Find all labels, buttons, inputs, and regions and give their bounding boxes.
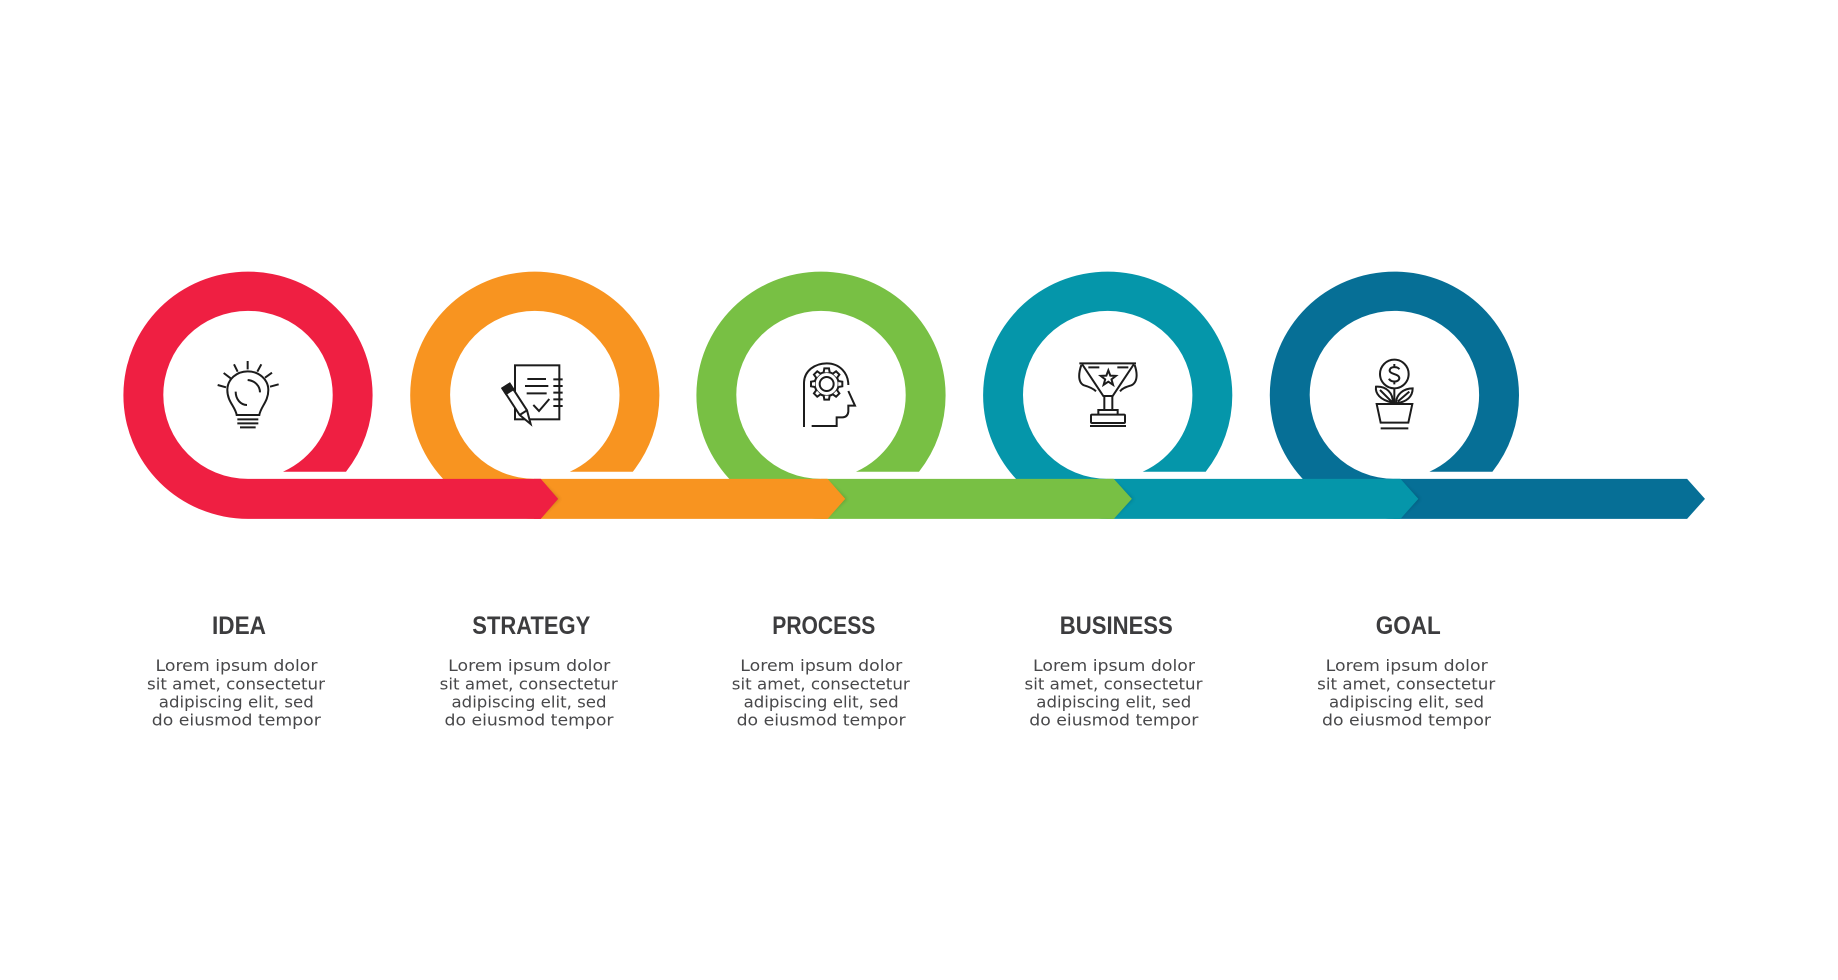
step 4 text [1024,612,1203,730]
step 5 text [1317,612,1496,730]
step 2: orange ring and arrow [410,272,847,519]
step 2 text [440,612,618,730]
heading: strategy: STRATEGY [472,612,591,640]
body text: idea: Lorem ipsum dolor [156,656,318,675]
heading: business: BUSINESS [1060,612,1173,640]
icon: light bulb [218,361,279,427]
step 1: red ring and arrow [123,272,560,519]
body text: idea: adipiscing elit, sed [159,692,314,712]
body text: process: do eiusmod tempor [737,711,906,730]
step 3 text [732,612,910,730]
body text: idea [147,656,325,730]
icon: notebook and pen [502,365,563,424]
heading: goal: GOAL [1376,612,1441,640]
icon: trophy [1079,363,1137,426]
body text: business: adipiscing elit, sed [1036,692,1191,712]
body text: idea: sit amet, consectetur [147,674,325,693]
step 1 text [147,612,325,730]
body text: goal [1317,656,1496,730]
body text: business: Lorem ipsum dolor [1033,656,1195,675]
body text: process [732,656,910,730]
body text: business: do eiusmod tempor [1029,711,1199,730]
heading: process: PROCESS [772,612,875,640]
body text: goal: do eiusmod tempor [1322,711,1491,730]
body text: process: adipiscing elit, sed [744,692,899,712]
body text: goal: sit amet, consectetur [1317,674,1496,693]
body text: strategy: sit amet, consectetur [440,674,618,693]
body text: strategy [440,656,618,730]
body text: goal: adipiscing elit, sed [1329,692,1484,712]
heading: idea: IDEA [212,612,266,640]
body text: process: sit amet, consectetur [732,674,910,693]
step 5: blue ring and arrow [1270,272,1705,519]
body text: strategy: do eiusmod tempor [444,711,614,730]
body text: business [1024,656,1203,730]
body text: strategy: adipiscing elit, sed [452,692,606,712]
icon: head with gear [804,363,855,427]
body text: goal: Lorem ipsum dolor [1326,656,1488,675]
body text: idea: do eiusmod tempor [152,711,321,730]
icon: money plant [1376,360,1413,428]
body text: business: sit amet, consectetur [1024,674,1203,693]
step 4: teal ring and arrow [983,272,1420,519]
step 3: green ring and arrow [696,272,1134,519]
body text: strategy: Lorem ipsum dolor [448,656,611,675]
body text: process: Lorem ipsum dolor [740,656,903,675]
